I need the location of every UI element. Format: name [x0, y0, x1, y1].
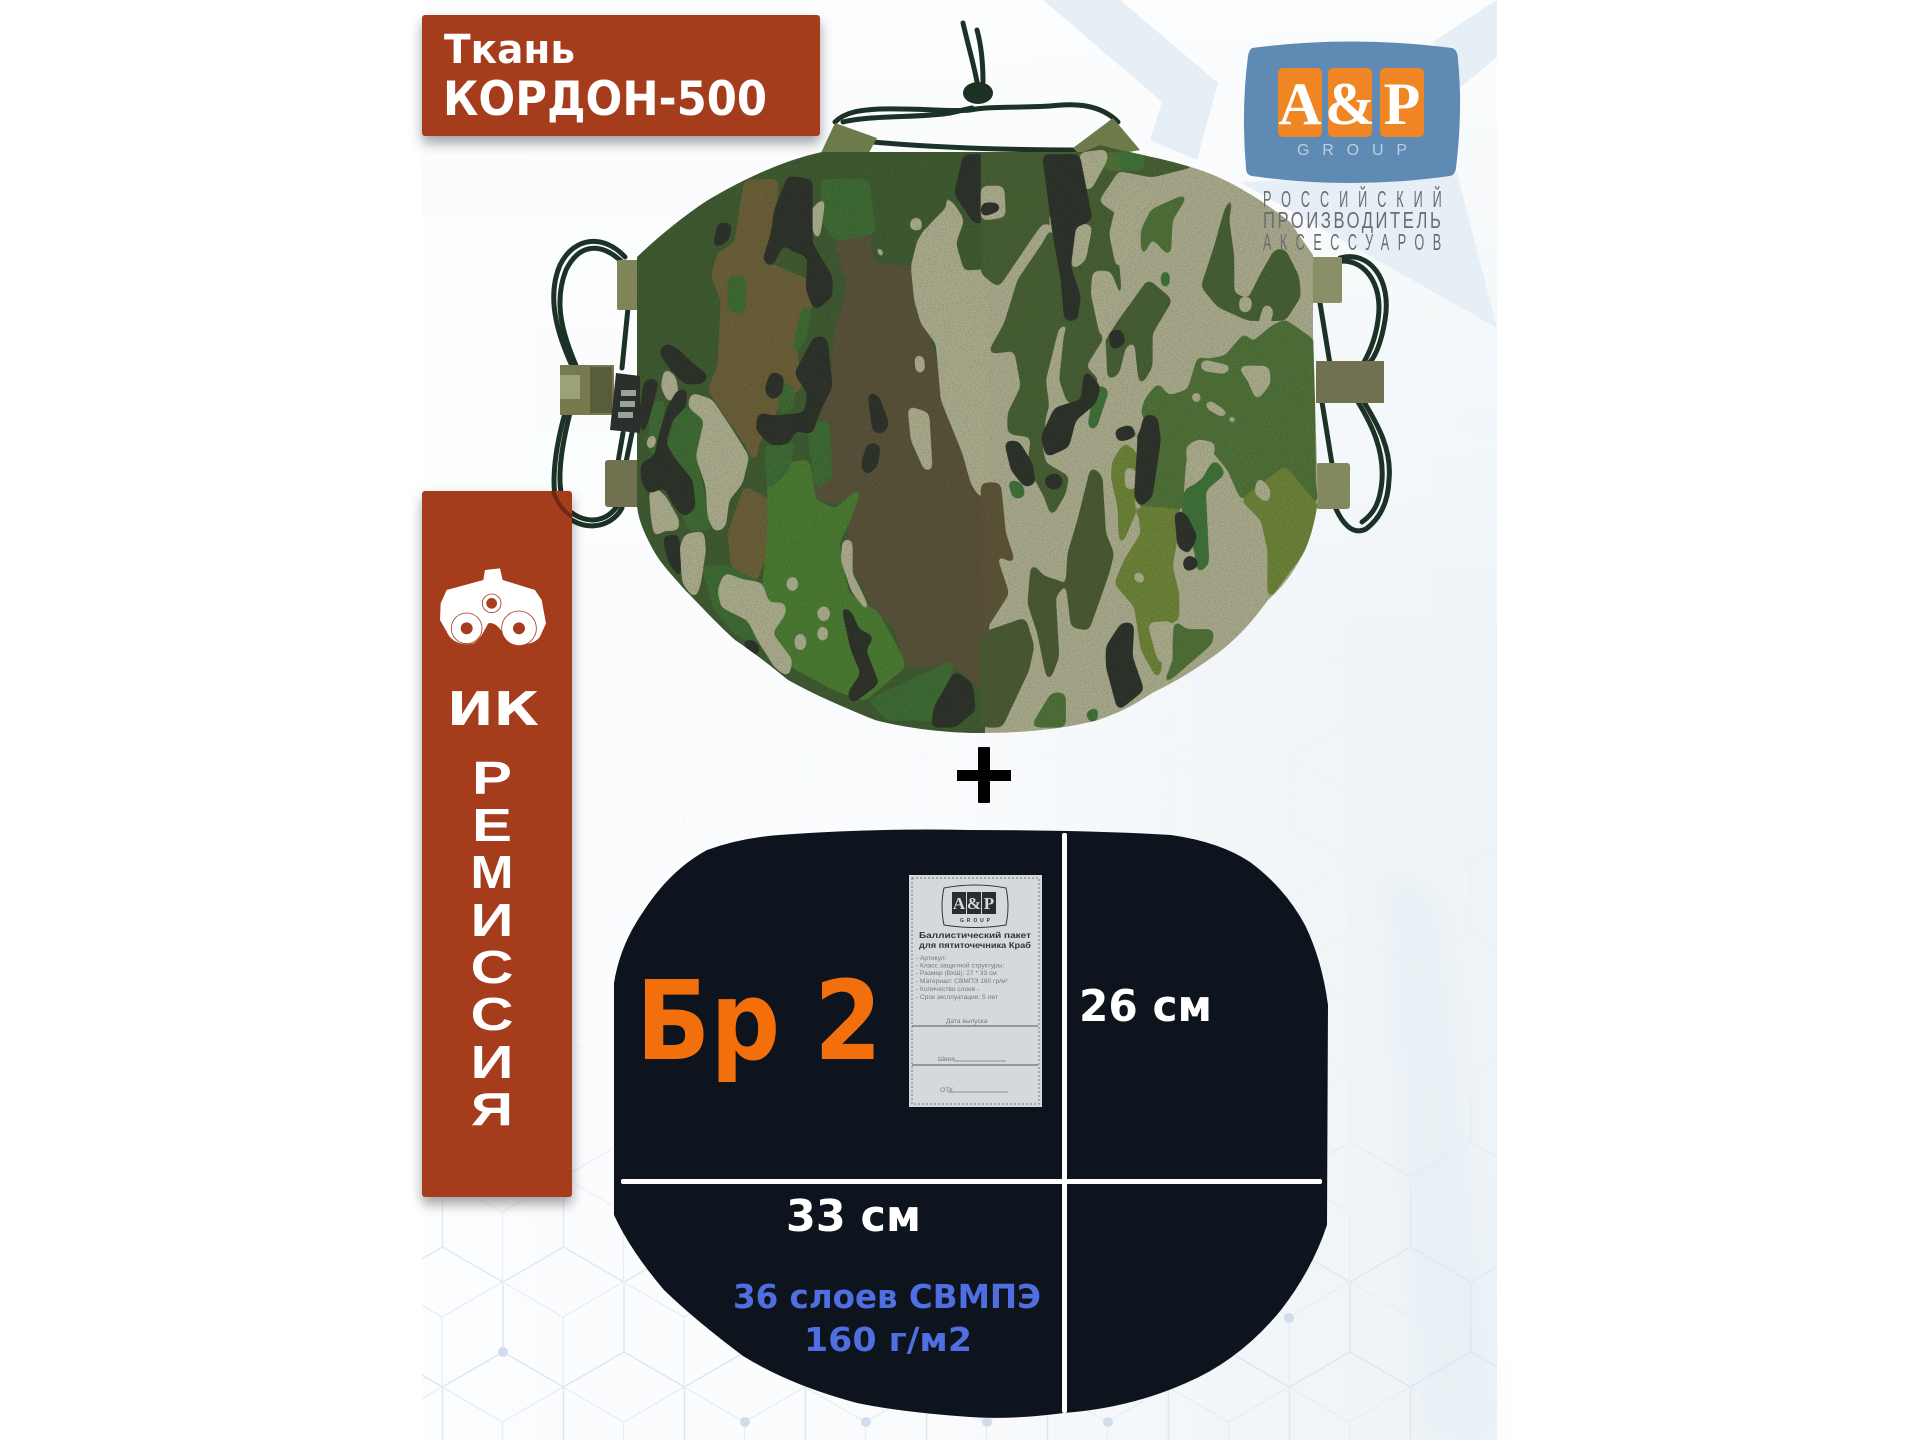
product label: - Артикул: [916, 955, 947, 962]
collar tabs [820, 118, 1140, 160]
left middle strap [560, 365, 614, 415]
product label: Швея [938, 1056, 955, 1063]
product label: P [984, 894, 994, 913]
side banner [422, 491, 572, 1197]
logo letters: & [1325, 71, 1375, 137]
camouflage carrier [610, 118, 1325, 740]
product label: - Класс защитной структуры: [916, 962, 1004, 970]
size tag [610, 373, 640, 433]
vertical word: remission: С [470, 941, 514, 993]
product label: GROUP [960, 918, 991, 924]
product label: Дата выпуска [946, 1018, 988, 1025]
carrier cords and straps, left [554, 241, 641, 526]
background star [1043, 0, 1497, 328]
right top tab [1310, 257, 1342, 303]
plus sign [957, 747, 1011, 803]
vertical word: remission: Я [471, 1083, 513, 1135]
tagline: АКСЕССУАРОВ [1263, 229, 1441, 255]
logo badge [1244, 42, 1460, 183]
product label: & [967, 894, 981, 913]
left lower tab [605, 460, 641, 507]
product label: для пятиточечника Краб [919, 941, 1031, 950]
banner text: product: КОРДОН-500 [443, 72, 767, 127]
width dimension: 33 см [786, 1191, 921, 1242]
top drawstring and toggle [835, 23, 1118, 150]
horizontal measure line [621, 1179, 1322, 1184]
tagline [1263, 186, 1442, 255]
vertical word: remission: И [470, 1036, 514, 1088]
product label: - Срок эксплуатации: 5 лет [916, 994, 998, 1001]
vertical measure line [1062, 833, 1067, 1413]
product label: A [953, 894, 966, 913]
left top tab [617, 260, 639, 310]
vertical word: remission: С [470, 988, 514, 1040]
pad shape [614, 830, 1328, 1418]
toggle [963, 82, 993, 104]
product label: - Размер (ВхШ): 27 * 33 см [916, 970, 997, 977]
vertical word: remission: И [470, 894, 514, 946]
label: IR: ИК [447, 682, 539, 736]
right middle strap [1316, 361, 1384, 403]
logo block [1244, 42, 1460, 255]
hexagon pattern [422, 1146, 1497, 1440]
density spec: 160 г/м2 [804, 1320, 972, 1359]
fabric banner [422, 15, 820, 136]
layers spec: 36 слоев СВМПЭ [733, 1277, 1041, 1316]
product label [909, 875, 1042, 1107]
carrier cords and straps, right [1310, 257, 1389, 531]
logo letters [1278, 68, 1424, 137]
background panel [422, 0, 1497, 1440]
tagline: РОССИЙСКИЙ [1263, 186, 1442, 212]
infographic canvas [414, 0, 1497, 1440]
fabric left half [640, 155, 988, 727]
cord seen through banner corner [553, 491, 572, 517]
product label: ОТК [940, 1087, 953, 1094]
product label: - Материал: СВМПЭ 160 гр/м² [916, 978, 1008, 985]
tagline: ПРОИЗВОДИТЕЛЬ [1263, 208, 1441, 234]
camouflage fabric [620, 140, 1325, 740]
logo letters: A [1278, 71, 1322, 137]
right lower tab [1316, 463, 1350, 509]
height dimension: 26 см [1079, 981, 1212, 1032]
logo letters: P [1384, 71, 1420, 137]
fabric right half [982, 143, 1318, 727]
protection class: Бр 2 [636, 957, 882, 1085]
logo GROUP word: GROUP [1297, 142, 1407, 159]
icon: night vision goggles [440, 568, 546, 646]
vertical word: remission [470, 752, 514, 1135]
ballistic pad [614, 830, 1328, 1418]
vertical word: remission: Р [472, 752, 512, 804]
vertical word: remission: Е [472, 799, 512, 851]
banner text: fabric: Ткань [444, 27, 575, 73]
product label: Баллистический пакет [919, 931, 1031, 940]
fabric texture [630, 140, 1325, 740]
product label: - Количество слоев - [916, 986, 979, 993]
vertical word: remission: М [470, 846, 514, 898]
